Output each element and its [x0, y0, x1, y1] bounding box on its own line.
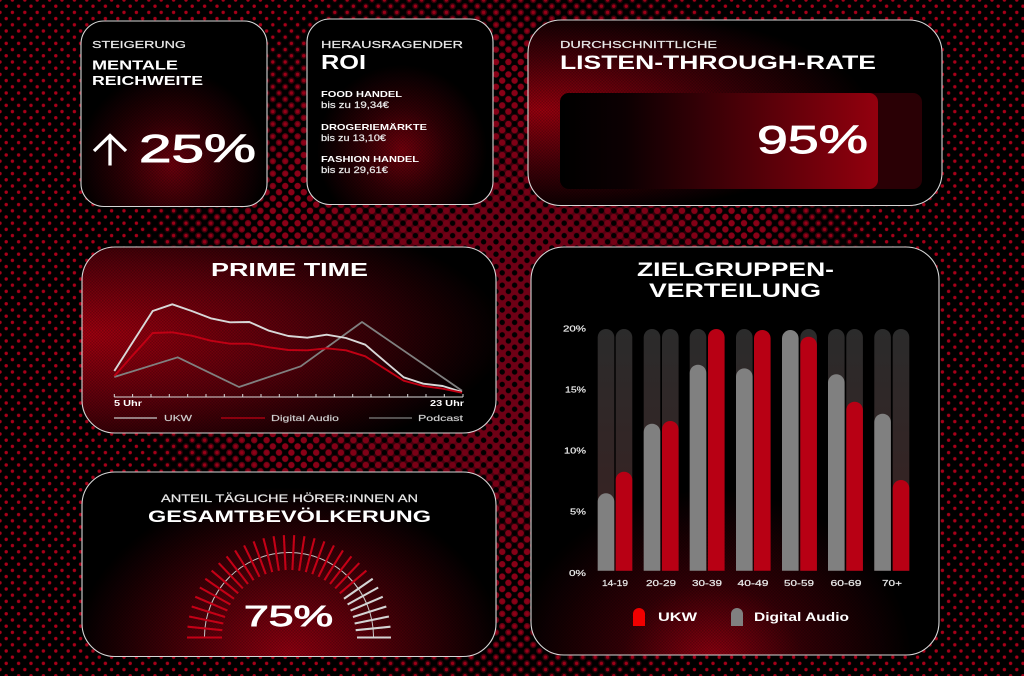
bars: UKW	[616, 329, 909, 571]
item: Food Handel: FOOD HANDEL	[321, 89, 402, 99]
value: 95%: 95%	[757, 119, 868, 162]
value: 75%: 75%	[244, 601, 333, 633]
item: Drogeriemärkte: DROGERIEMÄRKTE	[321, 122, 427, 132]
item: Drogeriemärkte	[321, 122, 427, 143]
line: UKW	[114, 304, 462, 392]
x axis labels: 40-49	[738, 578, 769, 588]
legend: UKW: UKW	[164, 413, 192, 423]
heading: Prime Time: PRIME TIME	[211, 259, 368, 280]
gauge: 75%	[187, 535, 391, 638]
item: Fashion Handel: FASHION HANDEL	[321, 154, 419, 164]
legend: Digital Audio: Digital Audio	[271, 413, 339, 423]
axis label: 5 Uhr: 5 Uhr	[114, 399, 142, 408]
item: Fashion Handel: bis zu 29,61€	[321, 165, 388, 175]
legend: Digital Audio	[221, 413, 339, 423]
heading: Zielgruppen-Verteilung: ZIELGRUPPEN-	[637, 259, 834, 281]
panel: ROI	[307, 19, 493, 204]
heading: mentale Reichweite: MENTALE	[92, 58, 178, 72]
x axis labels: 30-39	[692, 578, 722, 588]
bar tracks	[598, 329, 909, 571]
line: Podcast	[114, 322, 462, 391]
y axis labels: 15%	[565, 384, 587, 394]
legend: Digital Audio: Digital Audio	[754, 612, 849, 624]
legend: UKW: UKW	[658, 612, 697, 624]
panel: mentale Reichweite	[81, 21, 267, 206]
y axis labels: 10%	[564, 446, 587, 456]
line: Digital Audio	[114, 332, 462, 393]
axis label: 23 Uhr: 23 Uhr	[430, 399, 464, 408]
heading: Listen-Through-Rate: LISTEN-THROUGH-RATE	[560, 52, 876, 74]
x axis labels: 60-69	[830, 578, 862, 588]
heading: Zielgruppen-Verteilung: VERTEILUNG	[649, 280, 821, 302]
heading: mentale Reichweite	[92, 58, 203, 88]
heading: mentale Reichweite: REICHWEITE	[92, 73, 203, 88]
x axis labels: 14-19	[602, 578, 628, 588]
legend: Podcast: Podcast	[418, 413, 464, 423]
x axis labels: 50-59	[784, 578, 814, 588]
item: Food Handel: bis zu 19,34€	[321, 100, 389, 110]
panel: Prime Time	[82, 247, 496, 433]
y axis labels: 0%	[569, 568, 587, 578]
label: durchschnittliche: DURCHSCHNITTLICHE	[560, 39, 717, 51]
item: Drogeriemärkte: bis zu 13,10€	[321, 133, 386, 143]
heading: Gesamtbevölkerung: GESAMTBEVÖLKERUNG	[148, 507, 431, 526]
label: Anteil tägliche Hörer:innen an: ANTEIL TÄGLICHE HÖRER:INNEN AN	[161, 493, 418, 505]
x axis labels: 70+	[882, 578, 902, 588]
label: Steigerung: STEIGERUNG	[92, 39, 186, 51]
x axis labels: 20-29	[646, 578, 676, 588]
heading: ROI: ROI	[321, 52, 366, 74]
panel: Zielgruppenverteilung	[531, 247, 939, 655]
bars: Digital Audio	[598, 330, 891, 571]
legend: UKW	[633, 608, 697, 626]
value: 25%: 25%	[139, 128, 256, 171]
legend: Podcast	[369, 413, 464, 423]
heading: Zielgruppen-Verteilung	[637, 259, 834, 302]
legend: Digital Audio	[731, 608, 849, 626]
y axis labels	[563, 324, 587, 578]
y axis labels: 20%	[563, 324, 587, 334]
panel: Listen-Through-Rate	[528, 20, 942, 206]
x axis labels	[602, 578, 902, 588]
progress bar	[560, 93, 922, 189]
line chart	[114, 304, 463, 397]
legend: UKW	[114, 413, 192, 423]
label: herausragender: HERAUSRAGENDER	[321, 39, 464, 51]
y axis labels: 5%	[570, 506, 587, 516]
item: Fashion Handel	[321, 154, 419, 175]
item: Food Handel	[321, 89, 402, 110]
time axis	[114, 394, 463, 397]
icon: up arrow	[94, 136, 126, 166]
panel: Gesamtbevölkerung	[82, 472, 496, 656]
